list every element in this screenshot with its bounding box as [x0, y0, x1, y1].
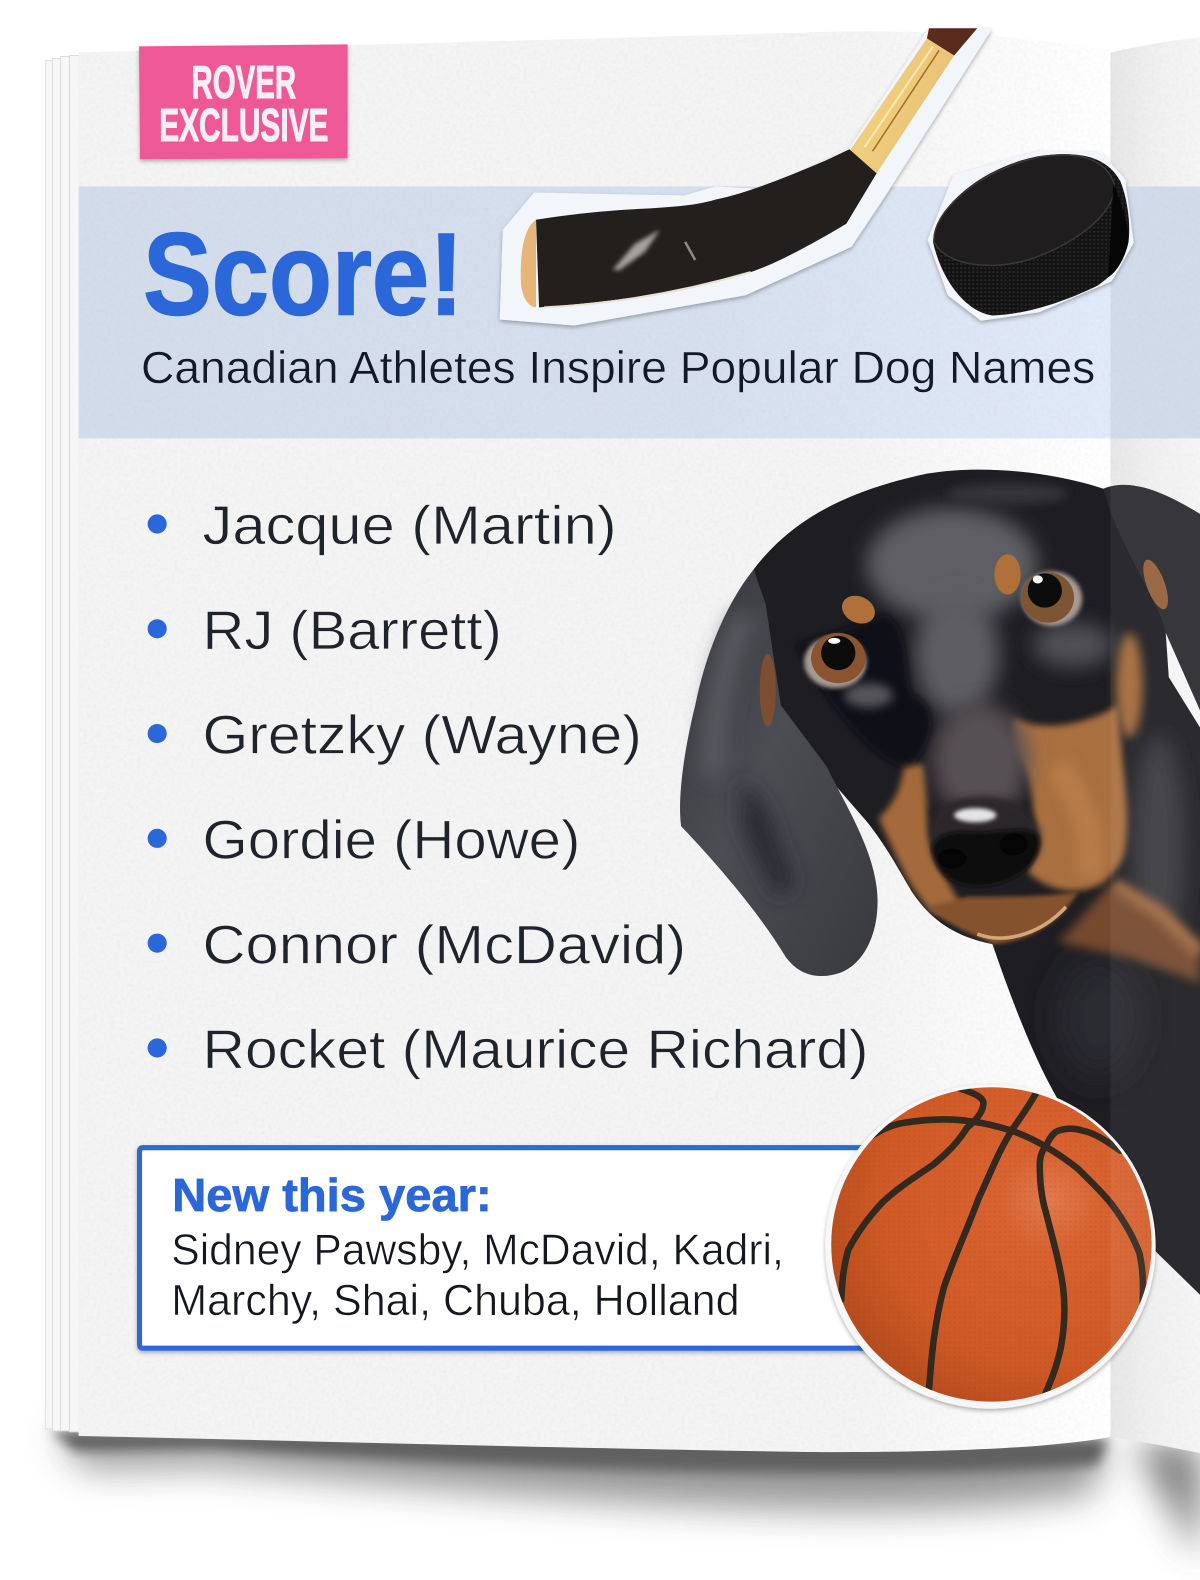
list item: Connor: Connor (McDavid): [203, 914, 686, 975]
eye patch dark: [796, 615, 931, 767]
stick blade: [536, 149, 877, 307]
title: Score!: [143, 208, 463, 339]
nose bridge: [932, 702, 1029, 819]
header band: [79, 186, 1200, 438]
callout: new this year: New this year:: [172, 1169, 492, 1221]
right facing page: [1110, 37, 1200, 1453]
tan muzzle left: [879, 761, 972, 922]
gutter shade over right page: [1110, 443, 1200, 1451]
name list: [148, 495, 869, 1080]
stick shaft: [849, 38, 954, 173]
ball seams: [841, 1086, 1143, 1406]
list item: RJ: RJ (Barrett): [203, 600, 502, 661]
tan neck and chest: [1116, 633, 1143, 738]
chin: [927, 892, 1078, 944]
callout: new this year: Marchy, Shai, Chuba, Holland: [171, 1277, 740, 1325]
stacked page edges: [45, 55, 80, 1432]
list item: Gretzky: Gretzky (Wayne): [203, 705, 642, 766]
badge: Rover Exclusive: ROVER: [191, 56, 296, 108]
list item: Jacque: Jacque (Martin): [203, 495, 617, 556]
subtitle: Canadian Athletes Inspire Popular Dog Names: [141, 342, 1095, 393]
sticker backing: [500, 28, 992, 326]
nose: [929, 796, 1041, 887]
left eye: [804, 636, 866, 688]
right eye: [1022, 571, 1082, 626]
badge: Rover Exclusive: [139, 44, 348, 159]
list item: Rocket: Rocket (Maurice Richard): [203, 1019, 869, 1080]
tan muzzle right: [1013, 705, 1127, 891]
magazine drop shadow: [50, 1431, 1200, 1557]
left magazine page: [79, 31, 1110, 1452]
face shading: [796, 484, 1200, 1078]
white gap between ear and neck: [1166, 633, 1200, 728]
left ear: [680, 569, 878, 976]
callout: new this year: Sidney Pawsby, McDavid, Kadri,: [171, 1227, 784, 1275]
illustration: dachshund: [680, 470, 1200, 1295]
badge: Rover Exclusive: EXCLUSIVE: [159, 99, 328, 151]
list item: Gordie: Gordie (Howe): [203, 810, 580, 871]
callout: new this year: [140, 1148, 905, 1348]
sticker: basketball: [825, 1084, 1156, 1409]
sticker: hockey puck: [933, 154, 1129, 315]
dog head and body: [754, 470, 1200, 1295]
right ear: [1103, 485, 1200, 726]
brow spots: [842, 596, 875, 624]
sticker: hockey stick: [500, 28, 992, 326]
